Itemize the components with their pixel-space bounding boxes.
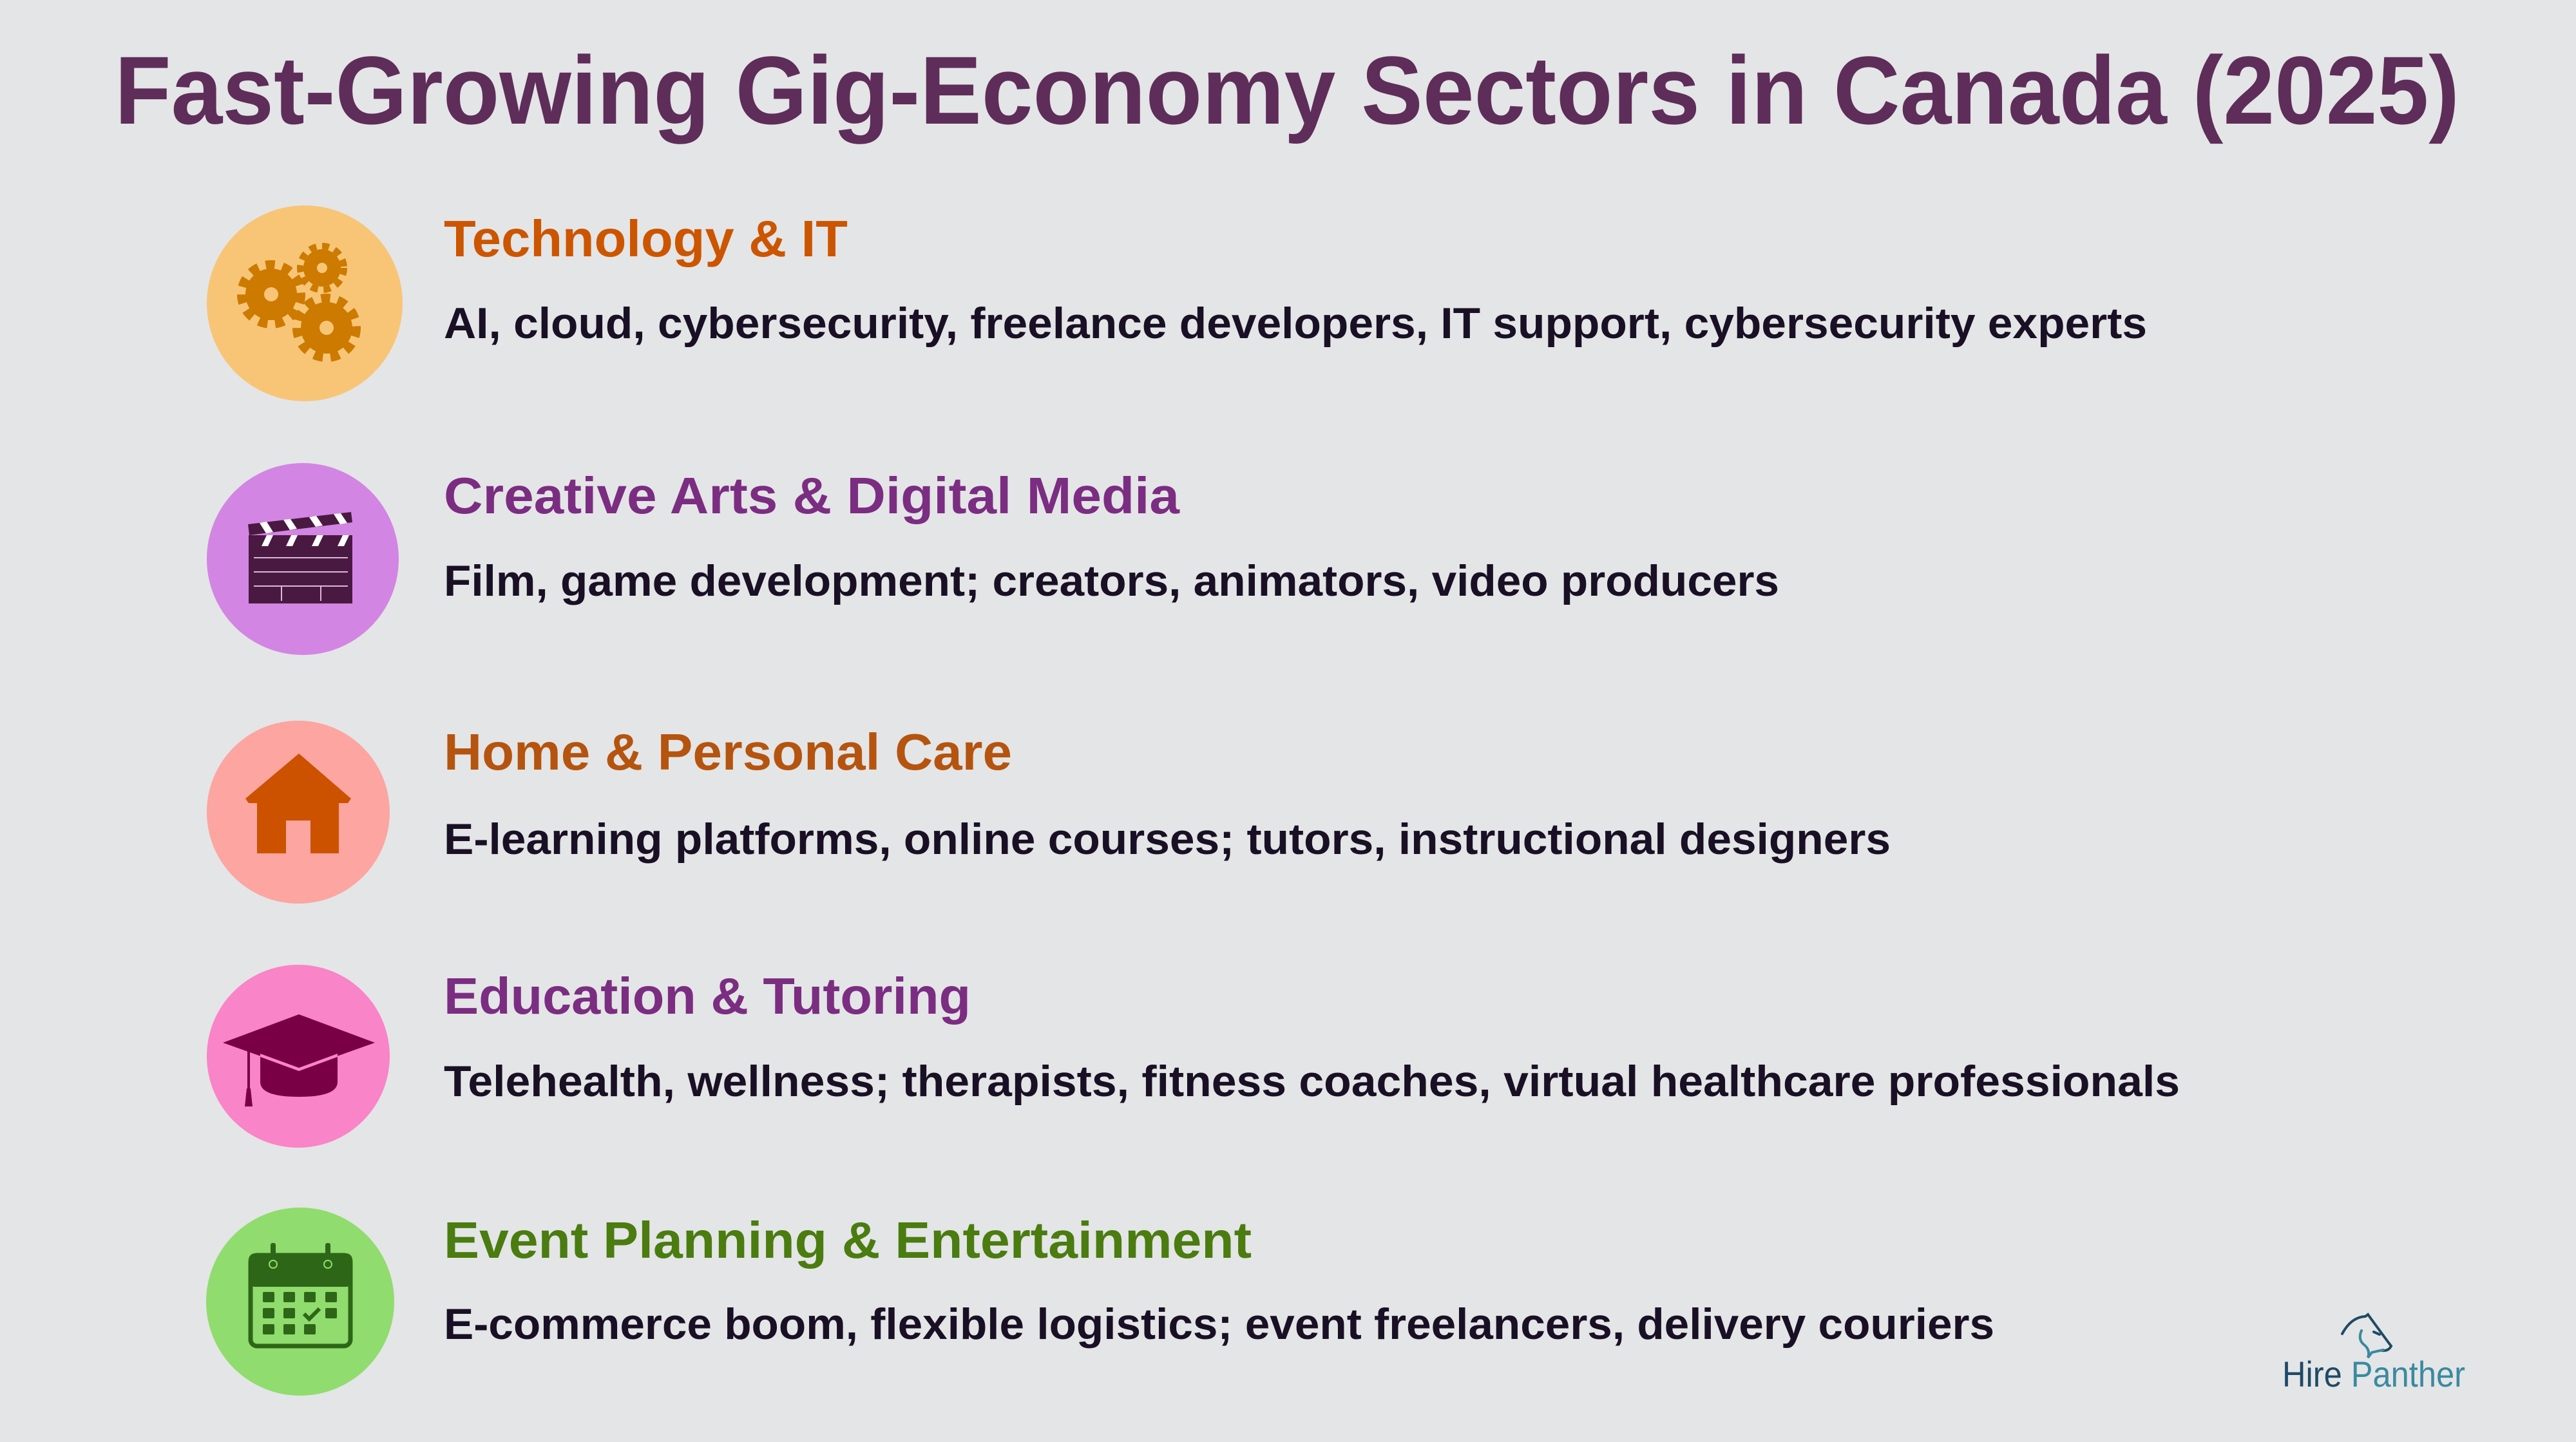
icon: gears <box>207 205 403 401</box>
heading: education: Education & Tutoring <box>444 967 971 1025</box>
description: technology: AI, cloud, cybersecurity, freelance developers, IT support, cybersecurity experts <box>444 299 2147 348</box>
description: home care: E-learning platforms, online courses; tutors, instructional designers <box>444 815 1891 864</box>
icon: graduation cap <box>207 965 390 1148</box>
row: events <box>206 1208 1994 1396</box>
icon: house <box>207 721 390 904</box>
icon: calendar <box>206 1208 394 1396</box>
description: education: Telehealth, wellness; therapists, fitness coaches, virtual healthcare professionals <box>444 1057 2180 1106</box>
logo: HirePanther <box>2282 1314 2465 1394</box>
heading: creative arts: Creative Arts & Digital Media <box>444 467 1180 524</box>
heading: events: Event Planning & Entertainment <box>444 1211 1252 1269</box>
heading: home care: Home & Personal Care <box>444 723 1012 781</box>
row: home care <box>207 721 1891 904</box>
title: Fast-Growing Gig-Economy Sectors in Canada (2025) <box>115 36 2459 144</box>
icon: panther head <box>2342 1314 2391 1358</box>
heading: technology: Technology & IT <box>444 210 848 267</box>
row: education <box>207 965 2180 1148</box>
description: events: E-commerce boom, flexible logistics; event freelancers, delivery couriers <box>444 1300 1994 1349</box>
icon: clapperboard <box>207 463 399 655</box>
row: creative arts <box>207 463 1779 655</box>
row: technology <box>207 205 2147 401</box>
logo text: Hire Panther <box>2282 1354 2465 1394</box>
description: creative arts: Film, game development; creators, animators, video producers <box>444 556 1779 605</box>
